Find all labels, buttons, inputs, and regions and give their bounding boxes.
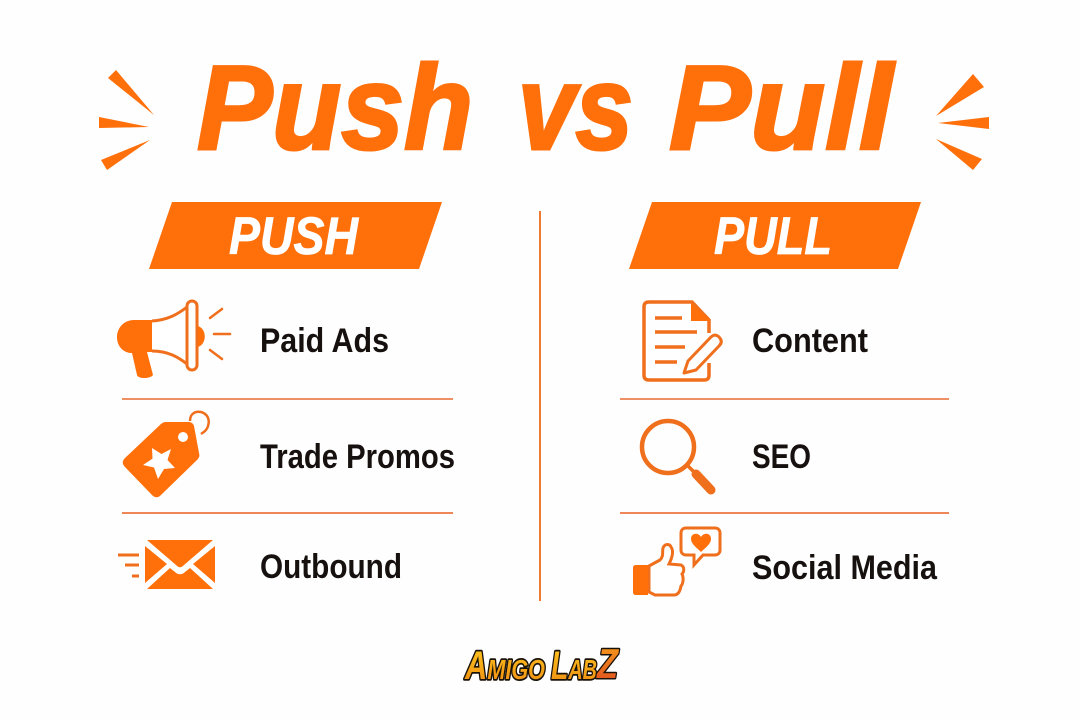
logo: amigo labz: AMIGO bbox=[464, 644, 545, 688]
title: Pull bbox=[669, 41, 896, 175]
label: content: Content bbox=[752, 322, 868, 360]
logo: amigo labz: LAB bbox=[551, 644, 597, 688]
heading banner: push bbox=[149, 202, 442, 269]
label: trade promos: Trade Promos bbox=[260, 438, 455, 476]
title: Push bbox=[197, 41, 473, 175]
logo: amigo labz: Z bbox=[596, 640, 619, 687]
title: vs bbox=[518, 41, 633, 175]
icon: megaphone bbox=[117, 301, 230, 378]
icon: envelope bbox=[118, 540, 215, 589]
heading banner: pull: PULL bbox=[714, 207, 832, 266]
center divider bbox=[539, 211, 541, 601]
heading banner: push: PUSH bbox=[229, 207, 359, 266]
label: social media: Social Media bbox=[752, 549, 938, 587]
label: seo: SEO bbox=[752, 438, 811, 476]
panel: push column bbox=[117, 202, 455, 589]
panel: pull column bbox=[620, 202, 949, 595]
icon: right burst lines bbox=[936, 74, 989, 170]
label: outbound: Outbound bbox=[260, 548, 402, 586]
label: paid ads: Paid Ads bbox=[260, 322, 389, 360]
heading banner: pull bbox=[629, 202, 921, 269]
icon: price tag bbox=[123, 412, 209, 497]
icon: left burst lines bbox=[99, 70, 154, 170]
title bbox=[197, 41, 896, 175]
icon: magnifying glass bbox=[642, 421, 711, 490]
icon: thumbs up and speech bubble bbox=[633, 528, 720, 595]
logo: amigo labz bbox=[464, 640, 619, 688]
icon: document with pencil bbox=[644, 302, 721, 380]
